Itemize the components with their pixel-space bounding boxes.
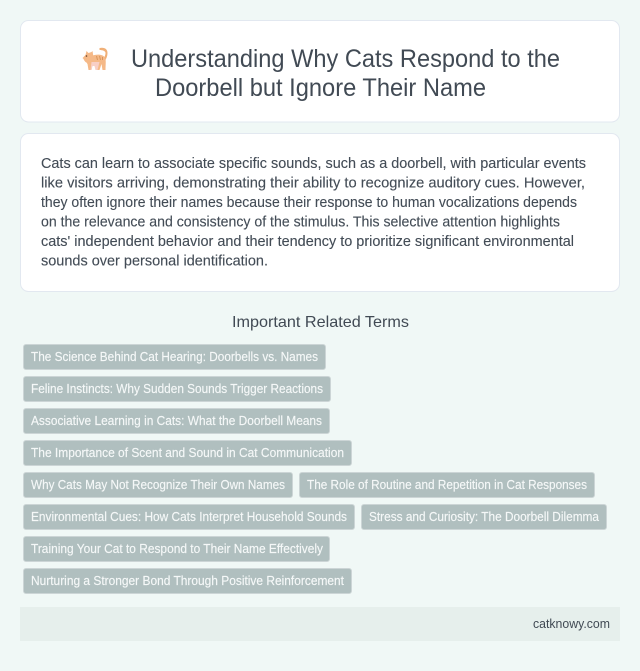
text block: summary: like visitors arriving, demonstrating their ability to recognize auditory cues. However, [41,174,585,192]
tag: The Role of Routine and Repetition in Cat Responses [307,478,587,492]
title: Understanding Why Cats Respond to the [131,45,560,73]
tag: The Science Behind Cat Hearing: Doorbells vs. Names [31,350,318,364]
tag: The Importance of Scent and Sound in Cat Communication [31,446,344,460]
tag [24,504,354,530]
tag: Associative Learning in Cats: What the Doorbell Means [31,414,322,428]
text block: summary: cats' independent behavior and their tendency to prioritize significant environmental [41,233,574,250]
text block: summary: sounds over personal identification. [41,252,268,270]
text block: summary: Cats can learn to associate specific sounds, such as a doorbell, with particular events [41,155,586,172]
tag: Feline Instincts: Why Sudden Sounds Trigger Reactions [31,382,323,396]
footer: site name: catknowy.com [533,616,610,631]
text block: summary: they often ignore their names because their response to human vocalizations depends [41,194,577,211]
tag [24,344,326,370]
panel: summary [20,134,620,292]
tag [24,536,330,562]
icon: cat [82,48,108,70]
tag [24,568,352,594]
tag list [24,344,606,594]
title: Doorbell but Ignore Their Name [155,74,486,102]
tag [24,472,292,498]
text block: summary: on the relevance and consistency of the stimulus. This selective attention highlights [41,214,560,230]
tag [24,408,330,434]
tag [300,472,594,498]
tag: Why Cats May Not Recognize Their Own Names [31,478,285,492]
tag [24,440,352,466]
footer [20,607,620,641]
tag: Stress and Curiosity: The Doorbell Dilemma [369,510,599,524]
tag: Training Your Cat to Respond to Their Name Effectively [31,542,324,556]
tag [24,376,330,402]
heading: related terms: Important Related Terms [232,314,409,331]
tag [362,504,606,530]
panel: title card [20,20,620,122]
tag: Nurturing a Stronger Bond Through Positive Reinforcement [31,574,344,588]
tag: Environmental Cues: How Cats Interpret Household Sounds [31,510,347,524]
